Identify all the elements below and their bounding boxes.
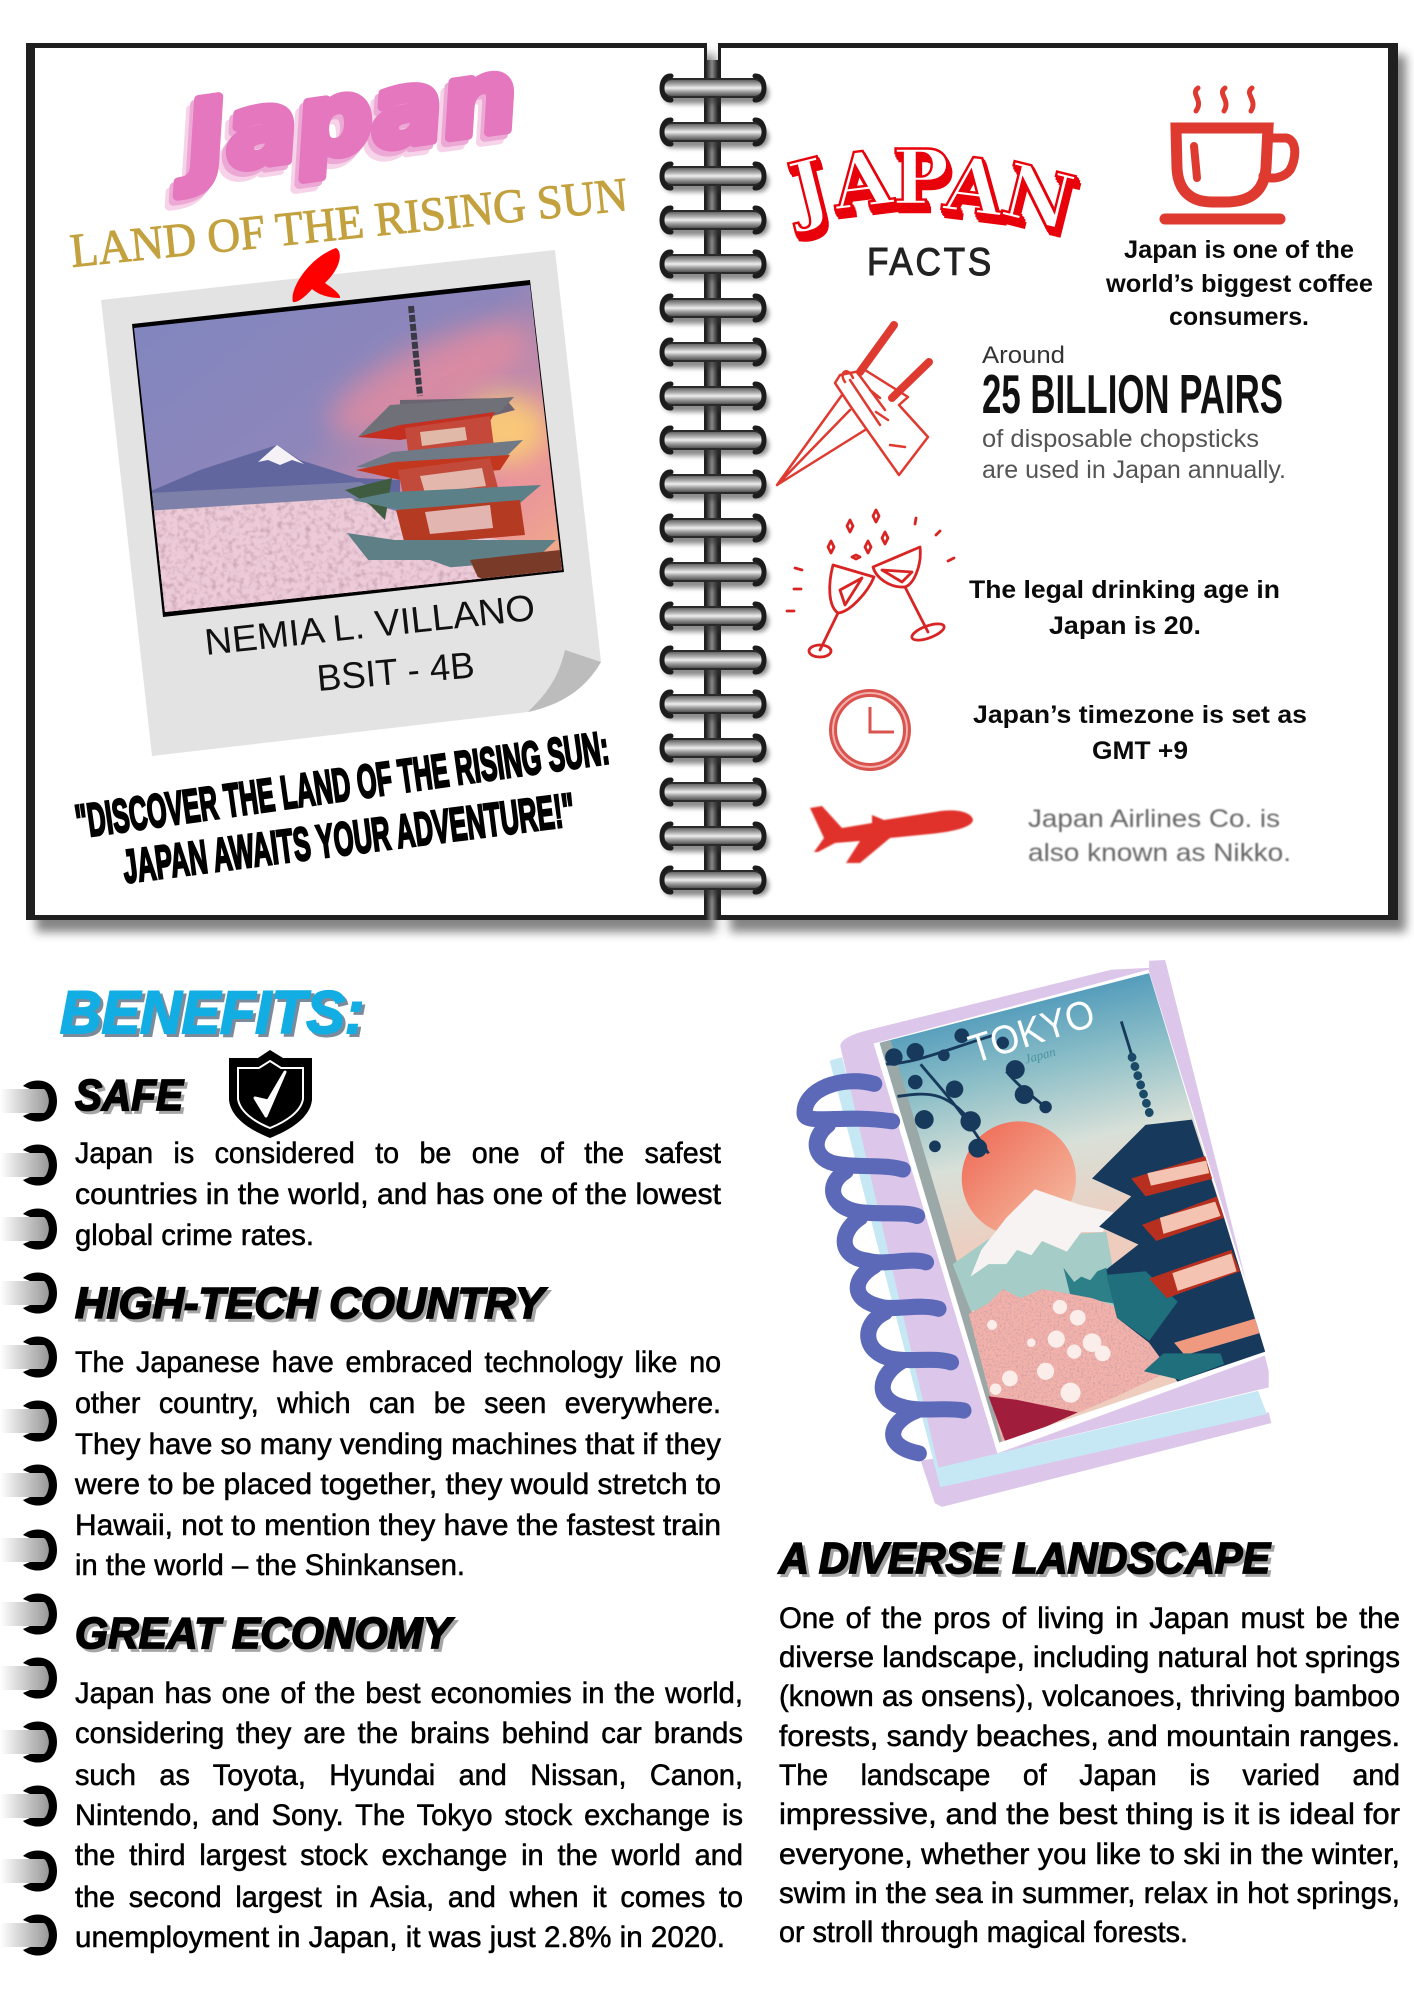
fact: chopsticks: are used in Japan annually. [982,456,1286,484]
icon: chopsticks in hand [777,325,929,485]
heading: benefits: BENEFITS: [60,979,364,1046]
icon: red clip [292,248,340,302]
title: Japan: Japan [161,36,524,200]
text: safe: countries in the world, and has one of the lowest [75,1178,722,1211]
text: economy: considering they are the brains behind car brands [75,1717,743,1750]
fact: drinking age: The legal drinking age in [969,576,1280,604]
text: economy: the third largest stock exchange in the world and [75,1839,743,1872]
text: diverse landscape: diverse landscape, including natural hot springs [779,1641,1400,1674]
heading: diverse landscape: A DIVERSE LANDSCAPE [778,1534,1272,1583]
cover art [867,968,1278,1450]
coil binding [805,1081,963,1453]
text: high-tech: The Japanese have embraced technology like no [75,1346,721,1379]
text: high-tech [74,1346,721,1582]
text: economy [75,1677,743,1954]
section: safe [75,1050,722,1252]
text: diverse landscape: or stroll through magical forests. [779,1916,1188,1949]
slogan: JAPAN AWAITS YOUR ADVENTURE!" [120,783,578,893]
heading: economy: GREAT ECONOMY [75,1609,455,1658]
icon: airplane [810,806,973,863]
fact: chopsticks [982,342,1286,484]
text: economy: Japan has one of the best economies in the world, [75,1677,743,1710]
text: diverse landscape: everyone, whether you like to ski in the winter, [779,1838,1400,1871]
text: economy: Nintendo, and Sony. The Tokyo stock exchange is [75,1799,743,1832]
class label: BSIT - 4B [315,644,476,699]
icon: coffee cup [1165,88,1295,219]
illustration: Tokyo notebook [805,960,1278,1507]
text: high-tech: They have so many vending machines that if they [75,1428,721,1461]
section: high-tech country [74,1279,721,1582]
fact: drinking age [969,576,1280,640]
text: safe: global crime rates. [75,1219,314,1252]
heading: FACTS: FACTS [867,241,994,284]
icon: shield [229,1050,312,1138]
panel: right notebook page [718,43,1406,932]
spiral binding [662,60,769,920]
pagoda [345,306,562,582]
pagoda [1092,1021,1267,1382]
fact: coffee: consumers. [1169,303,1309,331]
fact: coffee: Japan is one of the [1124,236,1354,264]
text: safe: Japan is considered to be one of the safest [75,1137,722,1170]
fact: timezone: GMT +9 [1092,737,1188,765]
text: high-tech: were to be placed together, they would stretch to [74,1468,721,1501]
text: economy: the second largest in Asia, and when it comes to [75,1881,743,1914]
text: diverse landscape: One of the pros of living in Japan must be the [779,1602,1400,1635]
fact: coffee: world’s biggest coffee [1105,270,1373,298]
subtitle: land of the rising sun: LAND OF THE RISING SUN [68,168,630,278]
panel: left notebook page [26,36,716,932]
fact: airlines: Japan Airlines Co. is [1028,805,1280,833]
text: diverse landscape: forests, sandy beaches, and mountain ranges. [779,1720,1400,1753]
heading: JAPAN arched: JAPAN [775,132,1083,248]
slogan [72,721,612,893]
text: diverse landscape: swim in the sea in summer, relax in hot springs, [779,1877,1400,1910]
fact: chopsticks: Around [982,342,1065,369]
section: great economy [75,1609,743,1954]
polaroid photo card [101,250,601,756]
section: a diverse landscape [778,1534,1400,1949]
fact: coffee [1105,236,1373,331]
text: diverse landscape: impressive, and the best thing is it is ideal for [779,1798,1400,1831]
fact: airlines [1028,805,1291,867]
fold corner [528,650,601,712]
text: high-tech: other country, which can be seen everywhere. [75,1387,721,1420]
cover title: Tokyo: TOKYO [964,991,1100,1072]
cover subtitle: Japan: Japan [1023,1045,1057,1066]
text: diverse landscape: (known as onsens), volcanoes, thriving bamboo [779,1680,1400,1713]
icon: clock [833,693,907,767]
heading: safe: SAFE [75,1071,185,1120]
fact: chopsticks: of disposable chopsticks [982,425,1259,453]
text: economy: unemployment in Japan, it was just 2.8% in 2020. [75,1921,725,1954]
fact: drinking age: Japan is 20. [1049,612,1201,640]
text: high-tech: Hawaii, not to mention they have the fastest train [75,1509,721,1542]
fact: airlines: also known as Nikko. [1028,839,1291,867]
fact: timezone: Japan’s timezone is set as [973,701,1307,729]
photo: pagoda and Mount Fuji [120,270,580,620]
text: high-tech: in the world – the Shinkansen. [75,1549,465,1582]
binding rings on left edge [0,1080,57,1956]
text: safe [75,1137,722,1252]
fact: timezone [973,701,1307,765]
blossom branches [883,1029,1052,1157]
text: diverse landscape [779,1602,1400,1949]
slogan: "DISCOVER THE LAND OF THE RISING SUN: [72,721,612,848]
author name: NEMIA L. VILLANO [202,587,537,663]
heading: high-tech: HIGH-TECH COUNTRY [75,1279,548,1328]
text: economy: such as Toyota, Hyundai and Nissan, Canon, [75,1759,743,1792]
icon: wine glasses [787,510,954,657]
